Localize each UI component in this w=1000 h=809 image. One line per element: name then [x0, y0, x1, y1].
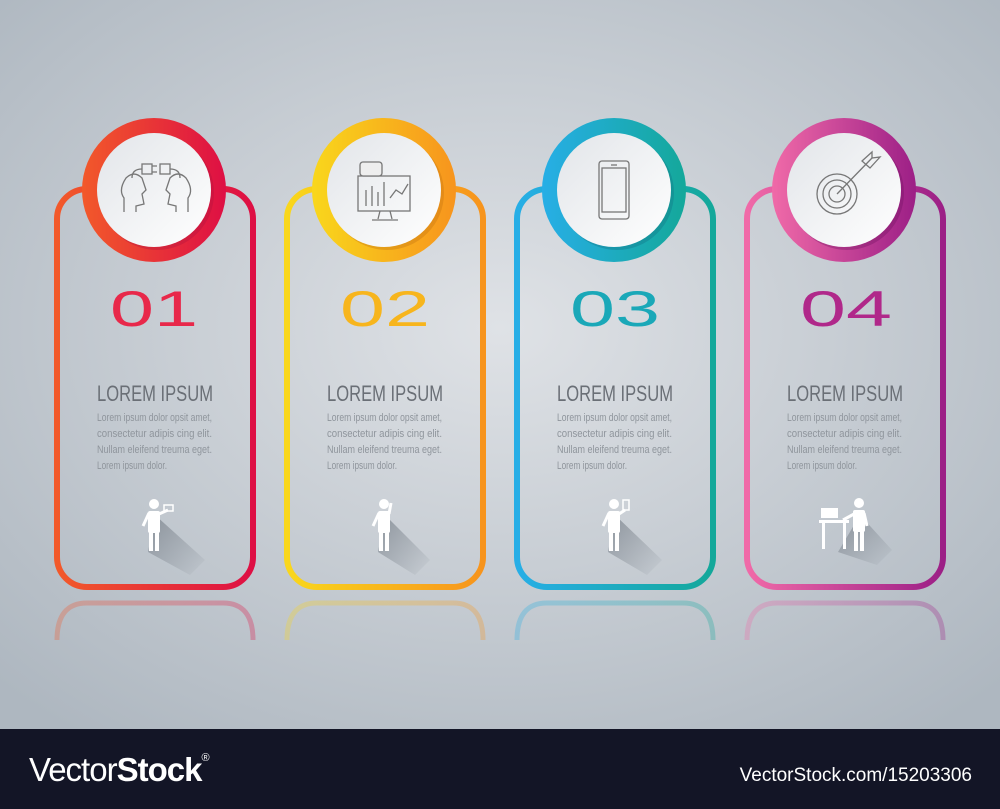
footer bar	[0, 729, 1000, 809]
frame 3	[517, 189, 713, 587]
footer url: VectorStock.com/15203306	[740, 765, 972, 786]
person icon 2	[373, 499, 430, 575]
body text 4: consectetur adipis cing elit.	[787, 428, 902, 440]
person at desk icon 4	[819, 498, 892, 565]
panel 4	[747, 118, 943, 640]
icon circle 1	[82, 118, 226, 262]
body text 1: Nullam eleifend treuma eget.	[97, 444, 212, 456]
body text 2	[327, 412, 442, 472]
panel 2	[287, 118, 483, 640]
frame 2	[287, 189, 483, 587]
footer logo: ®	[201, 752, 209, 764]
icon circle 3	[542, 118, 686, 262]
body text 1: Lorem ipsum dolor.	[97, 460, 167, 472]
body text 2: consectetur adipis cing elit.	[327, 428, 442, 440]
frame 4	[747, 189, 943, 587]
person icon 1	[143, 499, 205, 575]
person icon 3	[603, 499, 662, 575]
reflection 2	[287, 603, 483, 640]
body text 4: Nullam eleifend treuma eget.	[787, 444, 902, 456]
body text 2: Lorem ipsum dolor.	[327, 460, 397, 472]
body text 3: Lorem ipsum dolor.	[557, 460, 627, 472]
panel 1	[57, 118, 253, 640]
body text 3: Lorem ipsum dolor opsit amet,	[557, 412, 672, 424]
reflection 3	[517, 603, 713, 640]
heading 1: LOREM IPSUM	[97, 381, 213, 406]
body text 3: consectetur adipis cing elit.	[557, 428, 672, 440]
body text 4: Lorem ipsum dolor.	[787, 460, 857, 472]
body text 4: Lorem ipsum dolor opsit amet,	[787, 412, 902, 424]
footer logo: VectorStock	[29, 751, 201, 788]
frame 1	[57, 189, 253, 587]
body text 4	[787, 412, 902, 472]
reflection 4	[747, 603, 943, 640]
heading 4: LOREM IPSUM	[787, 381, 903, 406]
icon circle 2	[312, 118, 456, 262]
body text 1	[97, 412, 212, 472]
number 03: 03	[570, 281, 660, 337]
body text 3	[557, 412, 672, 472]
body text 2: Lorem ipsum dolor opsit amet,	[327, 412, 442, 424]
body text 1: consectetur adipis cing elit.	[97, 428, 212, 440]
panel 3	[517, 118, 713, 640]
body text 3: Nullam eleifend treuma eget.	[557, 444, 672, 456]
number 02: 02	[340, 281, 430, 337]
body text 2: Nullam eleifend treuma eget.	[327, 444, 442, 456]
reflection 1	[57, 603, 253, 640]
number 01: 01	[110, 281, 198, 337]
number 04: 04	[800, 281, 892, 337]
heading 3: LOREM IPSUM	[557, 381, 673, 406]
body text 1: Lorem ipsum dolor opsit amet,	[97, 412, 212, 424]
icon circle 4	[772, 118, 916, 262]
heading 2: LOREM IPSUM	[327, 381, 443, 406]
